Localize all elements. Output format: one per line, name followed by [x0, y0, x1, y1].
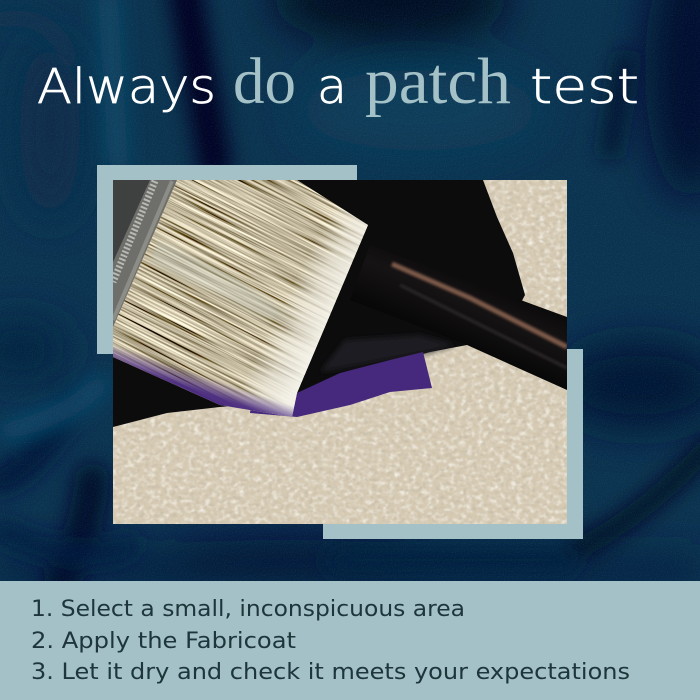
title: test	[530, 59, 639, 115]
steps panel	[0, 581, 700, 700]
title: Always	[37, 59, 216, 115]
frame accent: bottom right corner	[323, 349, 583, 539]
title: a	[317, 59, 347, 115]
step 1: 1. Select a small, inconspicuous area	[31, 597, 465, 622]
frame accent: top left corner	[97, 165, 357, 354]
step 2: 2. Apply the Fabricoat	[31, 629, 296, 654]
handle	[364, 256, 567, 390]
title: do	[233, 45, 296, 118]
purple patch	[250, 352, 432, 417]
step 3: 3. Let it dry and check it meets your expectations	[31, 660, 630, 685]
title	[37, 45, 639, 118]
brush bristles	[113, 180, 368, 417]
photo: paint brush on carpet patch	[113, 180, 567, 524]
title: patch	[365, 45, 511, 118]
carpet	[113, 180, 567, 524]
black backing fabric	[113, 180, 525, 427]
brush ferrule	[113, 180, 177, 327]
